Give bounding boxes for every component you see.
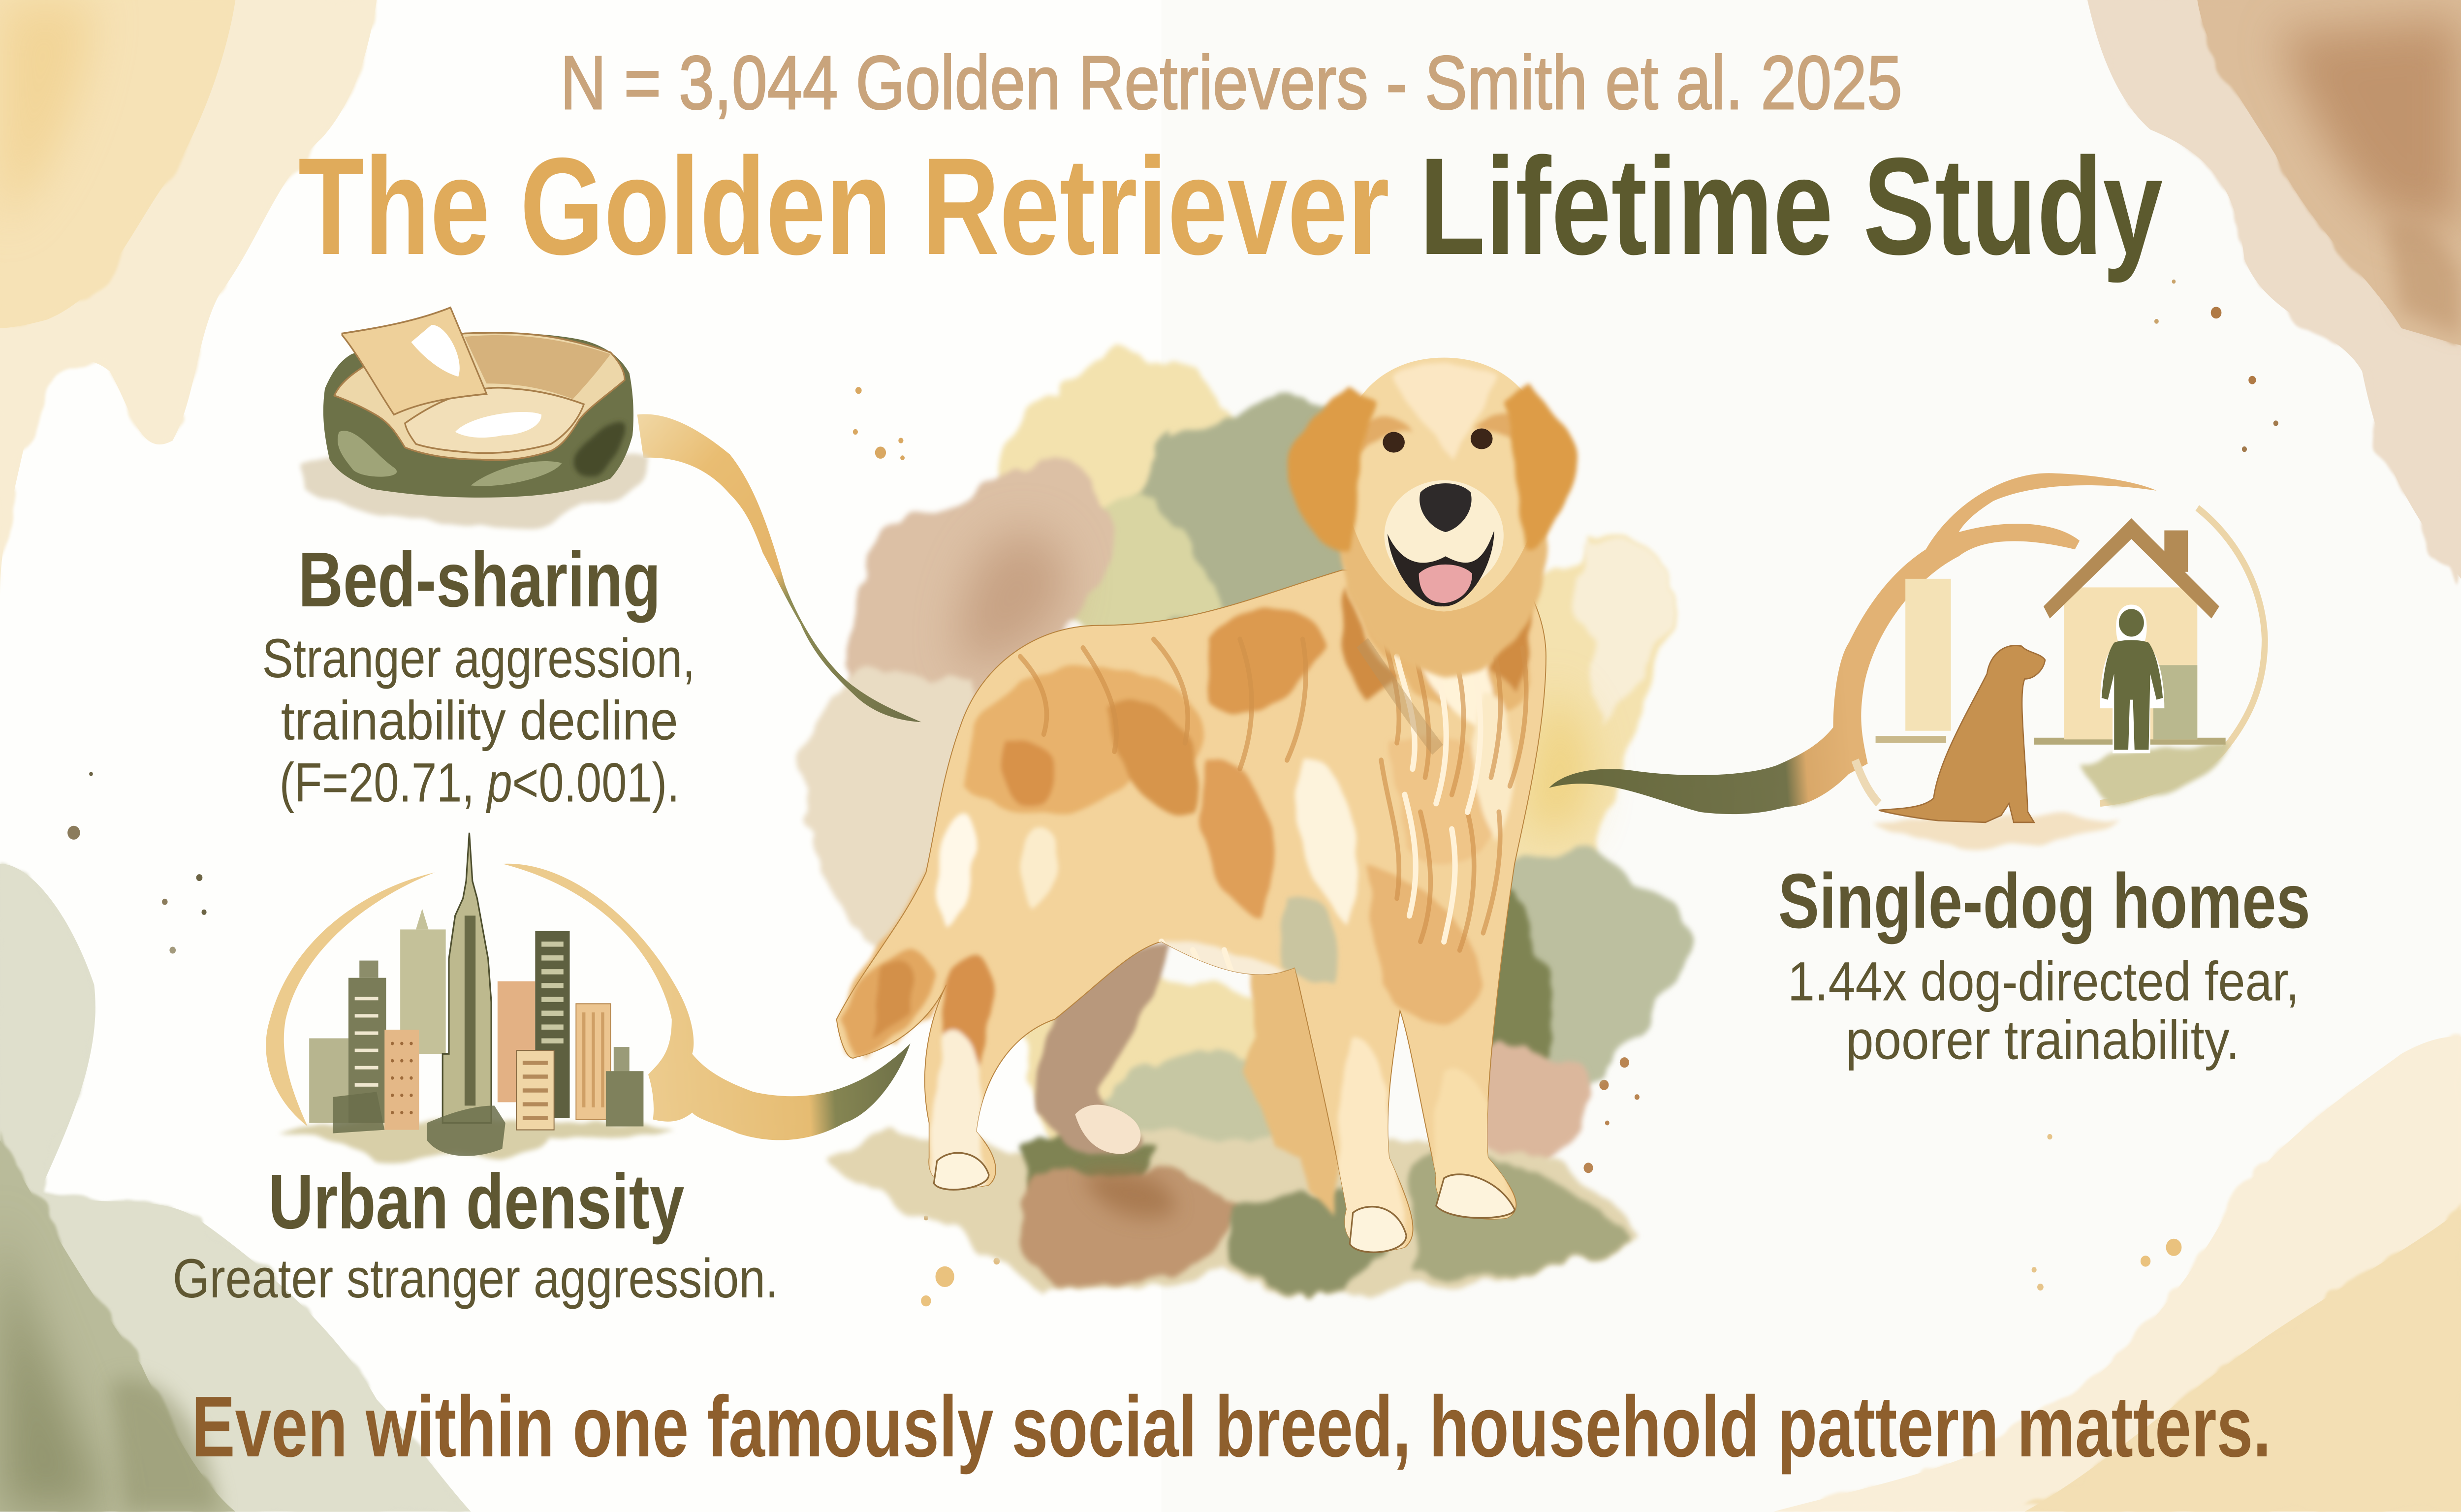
mane behind head bbox=[1341, 518, 1547, 677]
corner wash: top-left golden bbox=[0, 0, 377, 596]
detail text: single-dog homes bbox=[1788, 950, 2300, 1071]
body silhouette bbox=[837, 570, 1546, 1251]
panel: bed-sharing text bbox=[262, 536, 695, 814]
subtitle: N = 3,044 Golden Retrievers - Smith et al. 2025 bbox=[560, 40, 1902, 126]
icon: dog bed bbox=[298, 308, 648, 530]
detail text: bed-sharing: trainability decline bbox=[281, 690, 678, 751]
leg feathering bbox=[1243, 959, 1350, 1218]
fur patches bbox=[837, 574, 1530, 1253]
heading: urban density: Urban density bbox=[268, 1158, 684, 1245]
left ear bbox=[1286, 387, 1375, 550]
nose bbox=[1420, 483, 1472, 532]
detail text: bed-sharing: Stranger aggression, bbox=[262, 627, 695, 689]
tail fringe bbox=[835, 847, 961, 1057]
corner wash: top-right brown bbox=[2087, 0, 2461, 579]
corner wash: bottom-right golden bbox=[1773, 1037, 2461, 1512]
panel: urban density text bbox=[173, 1158, 779, 1309]
detail text: urban density: Greater stranger aggression. bbox=[173, 1248, 779, 1309]
connector and ring: urban density bbox=[266, 864, 910, 1140]
central watercolor wash behind dog bbox=[798, 353, 1687, 1200]
heading: bed-sharing: Bed-sharing bbox=[298, 536, 661, 623]
far hind leg bbox=[1034, 942, 1169, 1155]
heading: single-dog homes: Single-dog homes bbox=[1778, 857, 2310, 944]
detail text: bed-sharing bbox=[262, 627, 695, 814]
fur strands bbox=[1020, 622, 1526, 950]
eyes bbox=[1383, 428, 1493, 453]
splatter dots bbox=[67, 280, 2278, 1306]
panel: single-dog homes text bbox=[1778, 857, 2310, 1071]
icon: house with person and dog bbox=[1874, 518, 2229, 850]
icon: city skyline bbox=[278, 833, 676, 1163]
detail text: single-dog homes: 1.44x dog-directed fear, bbox=[1788, 950, 2300, 1012]
muzzle bbox=[1384, 480, 1504, 591]
connector: bed to dog bbox=[637, 414, 921, 722]
open mouth and tongue bbox=[1388, 531, 1494, 606]
right ear bbox=[1504, 383, 1578, 548]
head bbox=[1340, 358, 1547, 612]
detail text: bed-sharing: (F=20.71, p<0.001). bbox=[280, 752, 680, 814]
detail text: single-dog homes: poorer trainability. bbox=[1846, 1009, 2240, 1071]
golden retriever illustration bbox=[835, 358, 1578, 1253]
sitting dog bbox=[1879, 645, 2045, 822]
paws bbox=[934, 1153, 989, 1190]
person bbox=[2100, 605, 2164, 753]
ground wash under dog bbox=[827, 1123, 1640, 1298]
title block bbox=[298, 40, 2164, 284]
connector and ring: single-dog homes bbox=[1549, 473, 2265, 814]
heading: The Golden Retriever Lifetime Study bbox=[298, 129, 2164, 284]
corner wash: bottom-left olive bbox=[0, 864, 471, 1512]
